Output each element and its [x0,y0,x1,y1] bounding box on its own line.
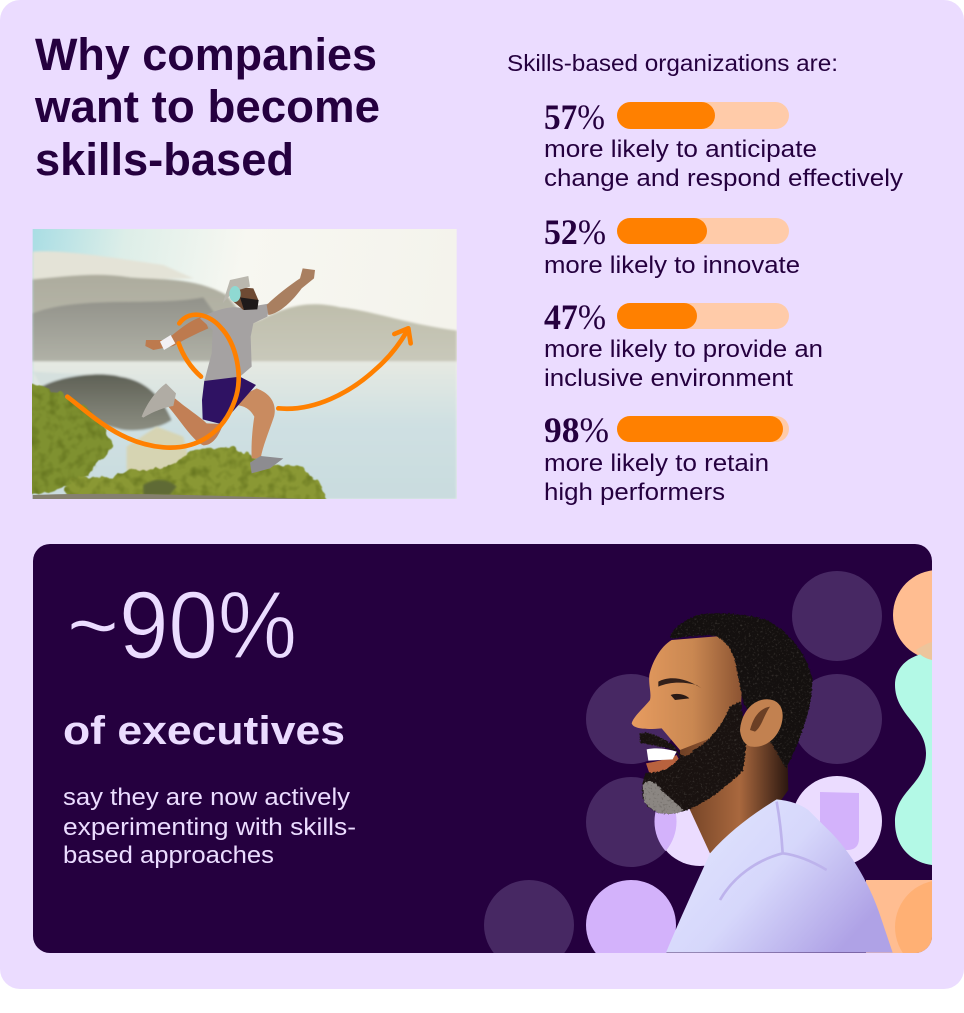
stat: 98%: more likely to retain [544,450,769,477]
stat: 98%: 98% [544,410,609,450]
description: based approaches [63,842,274,869]
photo: smiling man in profile [632,613,893,953]
stat: 98%: high performers [544,479,725,506]
stat: 52%: more likely to innovate [544,252,800,279]
back arm [145,317,208,350]
stat: 47% [544,297,823,392]
stat: 52%: 52% [544,212,606,252]
description [63,784,356,869]
stat: 98% [544,410,789,506]
orange arrow [67,315,411,448]
head [233,287,258,310]
heading: of executives: of executives [63,709,345,753]
title [34,29,380,185]
stat: 57%: more likely to anticipate [544,136,817,163]
stat: 47%: more likely to provide an [544,336,823,363]
stat: 47%: 47% [544,297,606,337]
front leg [238,388,275,458]
photo: runner on a cliff with orange arrow [28,229,457,503]
description: say they are now actively [63,784,350,811]
description: experimenting with skills- [63,814,356,841]
stat: 47%: inclusive environment [544,365,793,392]
stat: 52% [544,212,800,279]
decorative circles [484,570,932,953]
front arm [267,268,315,315]
subheading: Skills-based organizations are: [507,50,838,76]
shorts [202,375,256,425]
stat: 57%: change and respond effectively [544,165,903,192]
stat: 57% [544,97,903,192]
title: Why companies [35,29,377,80]
panel: executives [33,544,964,974]
back leg [168,398,223,445]
stat: 57%: 57% [544,97,605,137]
title: skills-based [35,134,294,185]
title: want to become [34,81,380,132]
big stat: ~90% [67,572,297,679]
torso [200,303,270,381]
